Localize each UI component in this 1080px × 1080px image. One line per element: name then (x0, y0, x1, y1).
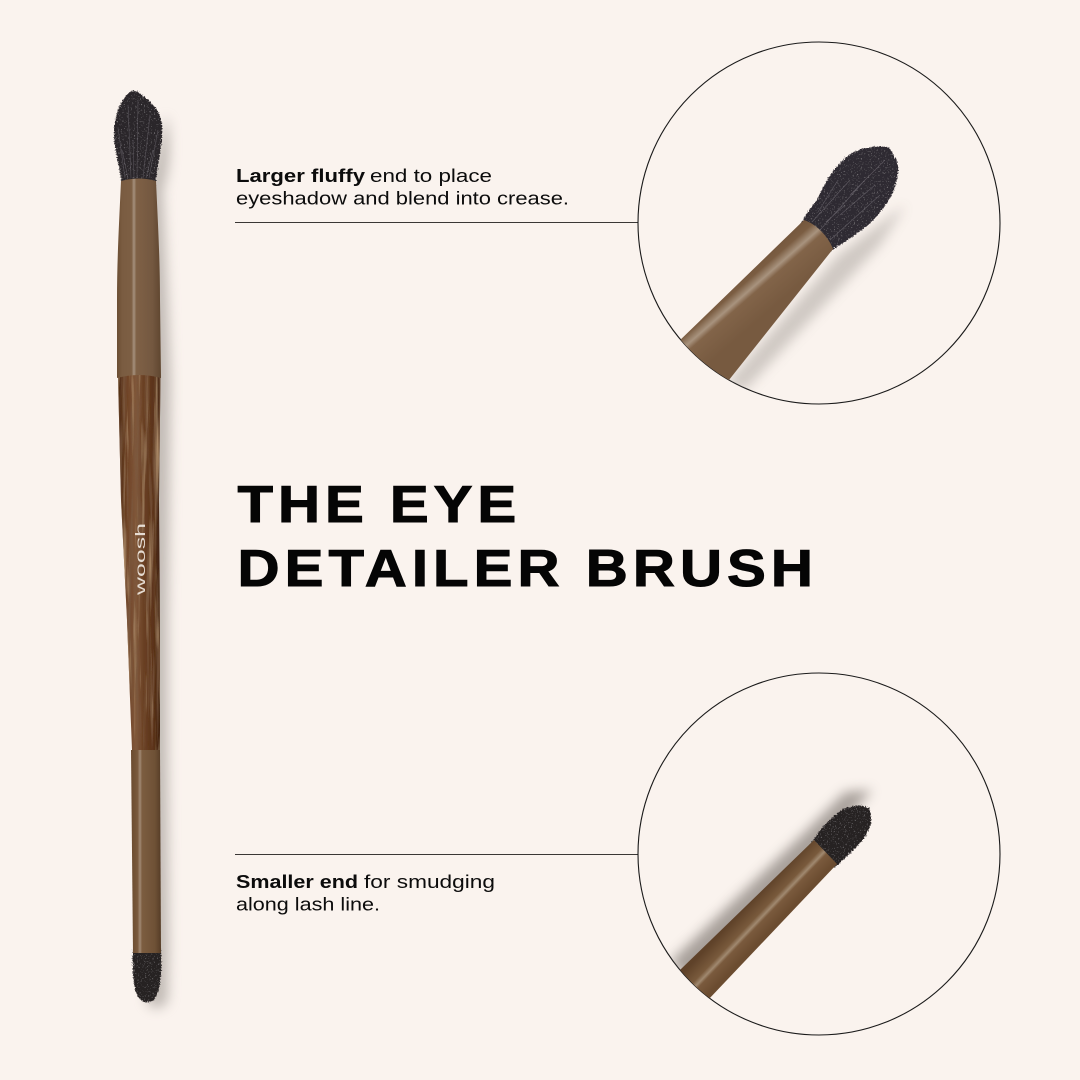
shadow (670, 790, 872, 980)
callout line: top (235, 222, 639, 223)
callout: larger fluffy end text: eyeshadow and blend into crease. (236, 188, 569, 208)
full brush product image (114, 91, 171, 1008)
heading (238, 475, 818, 597)
detail circle: large end (638, 42, 1000, 404)
heading: THE EYE (238, 475, 521, 533)
bristles close-up (800, 146, 898, 252)
callout: smaller end text: Smaller end (236, 871, 358, 892)
callout: smaller end text: along lash line. (236, 894, 380, 914)
callout: smaller end text (236, 871, 495, 914)
ferrule close-up (675, 220, 833, 385)
brand wordmark: woosh (132, 523, 148, 597)
callout: larger fluffy end text (236, 165, 569, 208)
ferrule close-up (680, 840, 837, 1000)
brush drop shadow (146, 115, 171, 1008)
heading: DETAILER BRUSH (238, 539, 818, 597)
detail circle: small end (638, 673, 1000, 1035)
small bristles (133, 948, 161, 1002)
callout line: bottom (235, 854, 639, 855)
upper ferrule (117, 178, 161, 378)
bristles close-up (810, 806, 871, 868)
callout: larger fluffy end text: end to place (370, 165, 492, 186)
callout: smaller end text: for smudging (364, 871, 495, 892)
lower ferrule (131, 750, 161, 953)
shadow (725, 205, 905, 390)
callout: larger fluffy end text: Larger fluffy (236, 165, 366, 186)
large fluffy bristles (114, 91, 162, 186)
wood handle (118, 373, 160, 750)
